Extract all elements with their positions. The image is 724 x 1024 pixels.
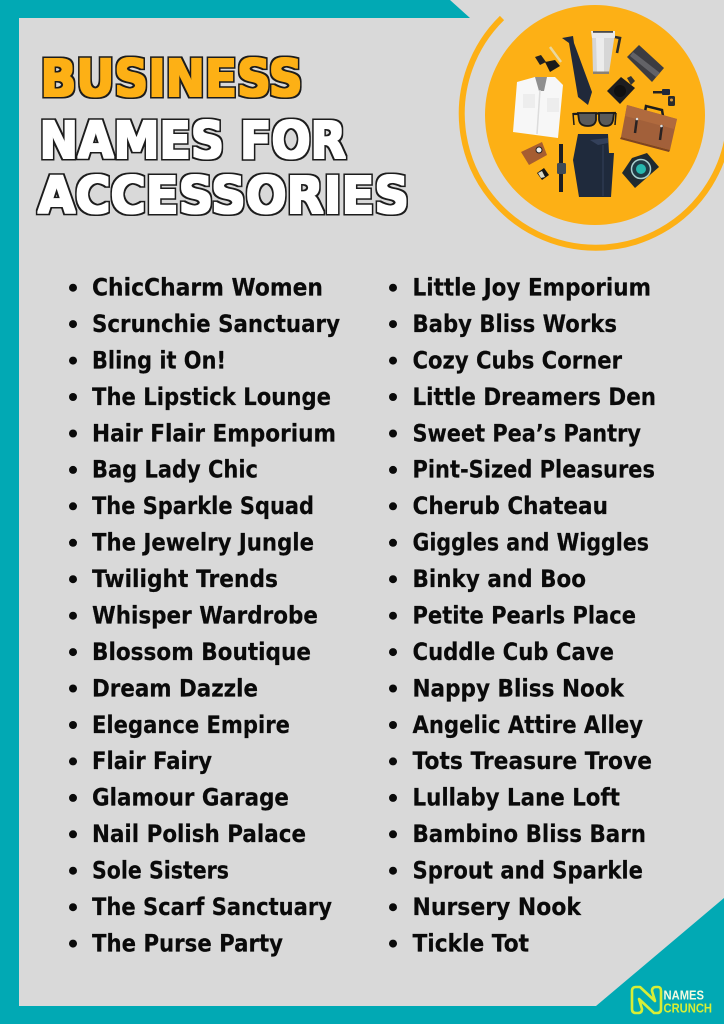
names list: left column — [69, 274, 340, 957]
icon: wristwatch — [557, 144, 566, 192]
names list: left column: Bag Lady Chic — [92, 456, 258, 484]
names list: left column: Sole Sisters — [92, 856, 229, 884]
orange circle — [485, 5, 705, 225]
names list: right column: Petite Pearls Place — [412, 602, 636, 630]
title line: business: BUSINESS — [40, 50, 302, 109]
title line: accessories: ACCESSORIES — [38, 167, 409, 226]
names list: left column: ChicCharm Women — [92, 274, 323, 302]
icon: wallet — [521, 142, 547, 165]
names list: right column: Nursery Nook — [412, 893, 582, 921]
names list: right column: Baby Bliss Works — [412, 310, 617, 338]
names list: right column: Angelic Attire Alley — [412, 711, 643, 739]
icon: perfume bottle — [607, 76, 635, 104]
names list: left column: Whisper Wardrobe — [92, 602, 318, 630]
bullets: left column — [69, 284, 77, 948]
icon: smartphone — [627, 45, 664, 82]
icon: trousers — [573, 134, 614, 197]
names list: right column: Tickle Tot — [412, 929, 529, 957]
icon: sunglasses — [573, 113, 616, 126]
icon: car key — [653, 89, 675, 106]
names list: right column: Cuddle Cub Cave — [412, 638, 614, 666]
names list: right column: Bambino Bliss Barn — [412, 820, 646, 848]
names list: left column: Twilight Trends — [92, 565, 278, 593]
names list: right column — [389, 274, 656, 957]
names list: right column: Little Joy Emporium — [412, 274, 651, 302]
names list: left column: Glamour Garage — [92, 784, 289, 812]
names list: left column: The Lipstick Lounge — [92, 383, 331, 411]
names list: left column: Flair Fairy — [92, 747, 212, 775]
icon: shirt — [513, 77, 563, 138]
logo mark: N — [632, 987, 661, 1013]
names list: right column: Sweet Pea’s Pantry — [412, 419, 641, 447]
names list: left column: The Scarf Sanctuary — [92, 893, 332, 921]
names list: left column: Hair Flair Emporium — [92, 419, 336, 447]
names list: right column: Nappy Bliss Nook — [412, 674, 625, 702]
names list: left column: The Purse Party — [92, 929, 283, 957]
names list: left column: Nail Polish Palace — [92, 820, 306, 848]
names list: right column: Cherub Chateau — [412, 492, 608, 520]
logo wordmark: crunch: CRUNCH — [664, 1002, 712, 1016]
orange arc around illustration — [462, 18, 724, 248]
logo: names crunch — [632, 987, 712, 1016]
icon: tie — [562, 36, 592, 105]
icon: travel mug — [591, 31, 620, 74]
names list: right column: Lullaby Lane Loft — [412, 784, 620, 812]
title line: names for: NAMES FOR — [40, 112, 346, 171]
names list: right column: Sprout and Sparkle — [412, 856, 643, 884]
names list: right column: Binky and Boo — [412, 565, 586, 593]
icon: small card — [537, 168, 549, 180]
names list: left column: Scrunchie Sanctuary — [92, 310, 340, 338]
logo wordmark: names: NAMES — [664, 988, 704, 1002]
names list: left column: Elegance Empire — [92, 711, 290, 739]
names list: left column: The Sparkle Squad — [92, 492, 314, 520]
icon: lighter — [535, 47, 561, 72]
names list: left column: Bling it On! — [92, 346, 226, 374]
names list: left column: The Jewelry Jungle — [92, 529, 314, 557]
icon: briefcase — [620, 105, 677, 152]
bullets: right column — [389, 284, 397, 948]
names list: right column: Giggles and Wiggles — [412, 529, 649, 557]
names list: right column: Pint-Sized Pleasures — [412, 456, 655, 484]
names list: right column: Little Dreamers Den — [412, 383, 656, 411]
title — [38, 50, 409, 226]
names list: left column: Blossom Boutique — [92, 638, 311, 666]
names list: left column: Dream Dazzle — [92, 674, 258, 702]
names list: right column: Tots Treasure Trove — [412, 747, 652, 775]
icon: camera — [622, 153, 659, 188]
illustration: accessories flat lay — [485, 5, 705, 225]
names list: right column: Cozy Cubs Corner — [412, 346, 622, 374]
